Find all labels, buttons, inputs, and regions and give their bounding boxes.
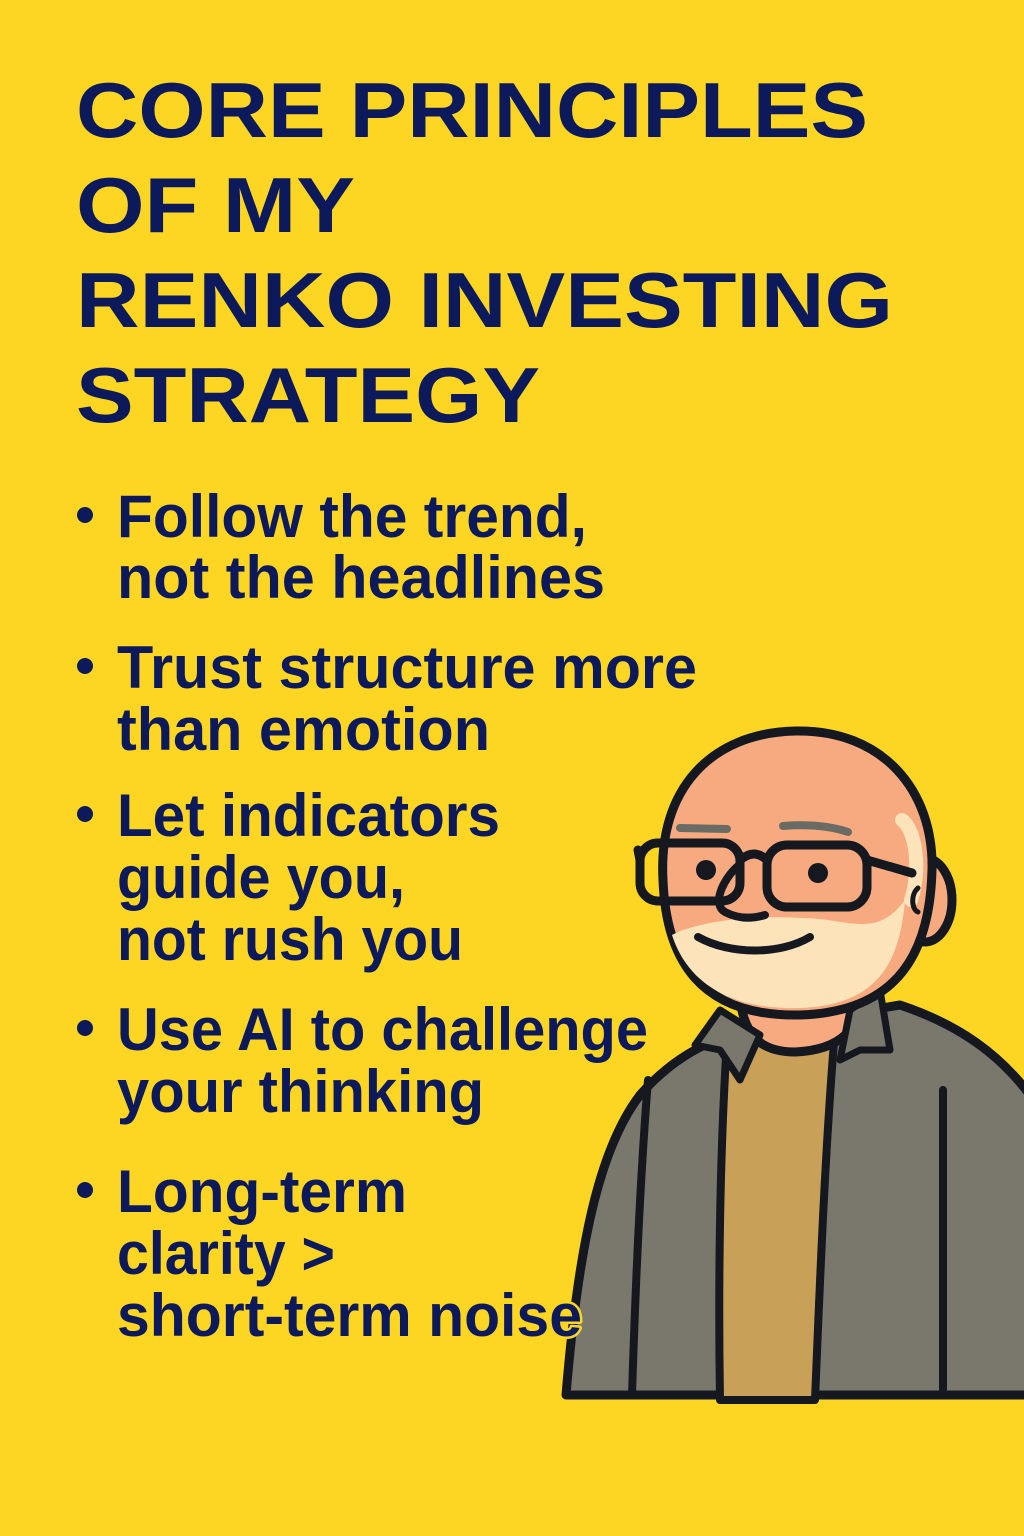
body / jacket [566,1005,1024,1395]
nose [719,866,765,918]
title: RENKO INVESTING [76,256,893,344]
bullet 1: Follow the trend, [117,483,587,550]
bullet 2: Trust structure more [117,634,697,701]
bullet 5 [77,1158,582,1349]
bullet 3: guide you, [117,844,405,911]
ear detail [913,888,918,912]
bullet 4 [77,996,648,1125]
head [663,731,932,1015]
ear [898,858,952,942]
glasses [640,843,740,901]
bullet 5: short-term noise [117,1282,582,1349]
jacket lines [632,1080,648,1395]
bullet 3 [77,782,500,973]
neck [740,990,865,1052]
collars [695,1010,760,1080]
eyes [696,860,716,880]
bullet 3: Let indicators [117,782,500,849]
title [76,66,893,439]
bullet 1: not the headlines [117,544,605,611]
shirt [719,1030,835,1400]
bullet 4: Use AI to challenge [117,996,648,1063]
bullet 5: Long-term [117,1158,407,1225]
title: OF MY [76,161,355,249]
bullet 3: not rush you [117,906,463,973]
illustration: bald man with glasses [566,731,1024,1400]
title: STRATEGY [76,351,540,439]
bullet 1 [77,483,605,611]
smile [698,937,810,950]
beard [672,900,905,1008]
bullet 2: than emotion [117,696,490,763]
eyebrows [680,828,727,829]
bullet 5: clarity > [117,1220,335,1287]
bullet 4: your thinking [117,1058,484,1125]
bullet list [77,483,697,1349]
title: CORE PRINCIPLES [76,66,868,154]
bullet 2 [77,634,697,763]
